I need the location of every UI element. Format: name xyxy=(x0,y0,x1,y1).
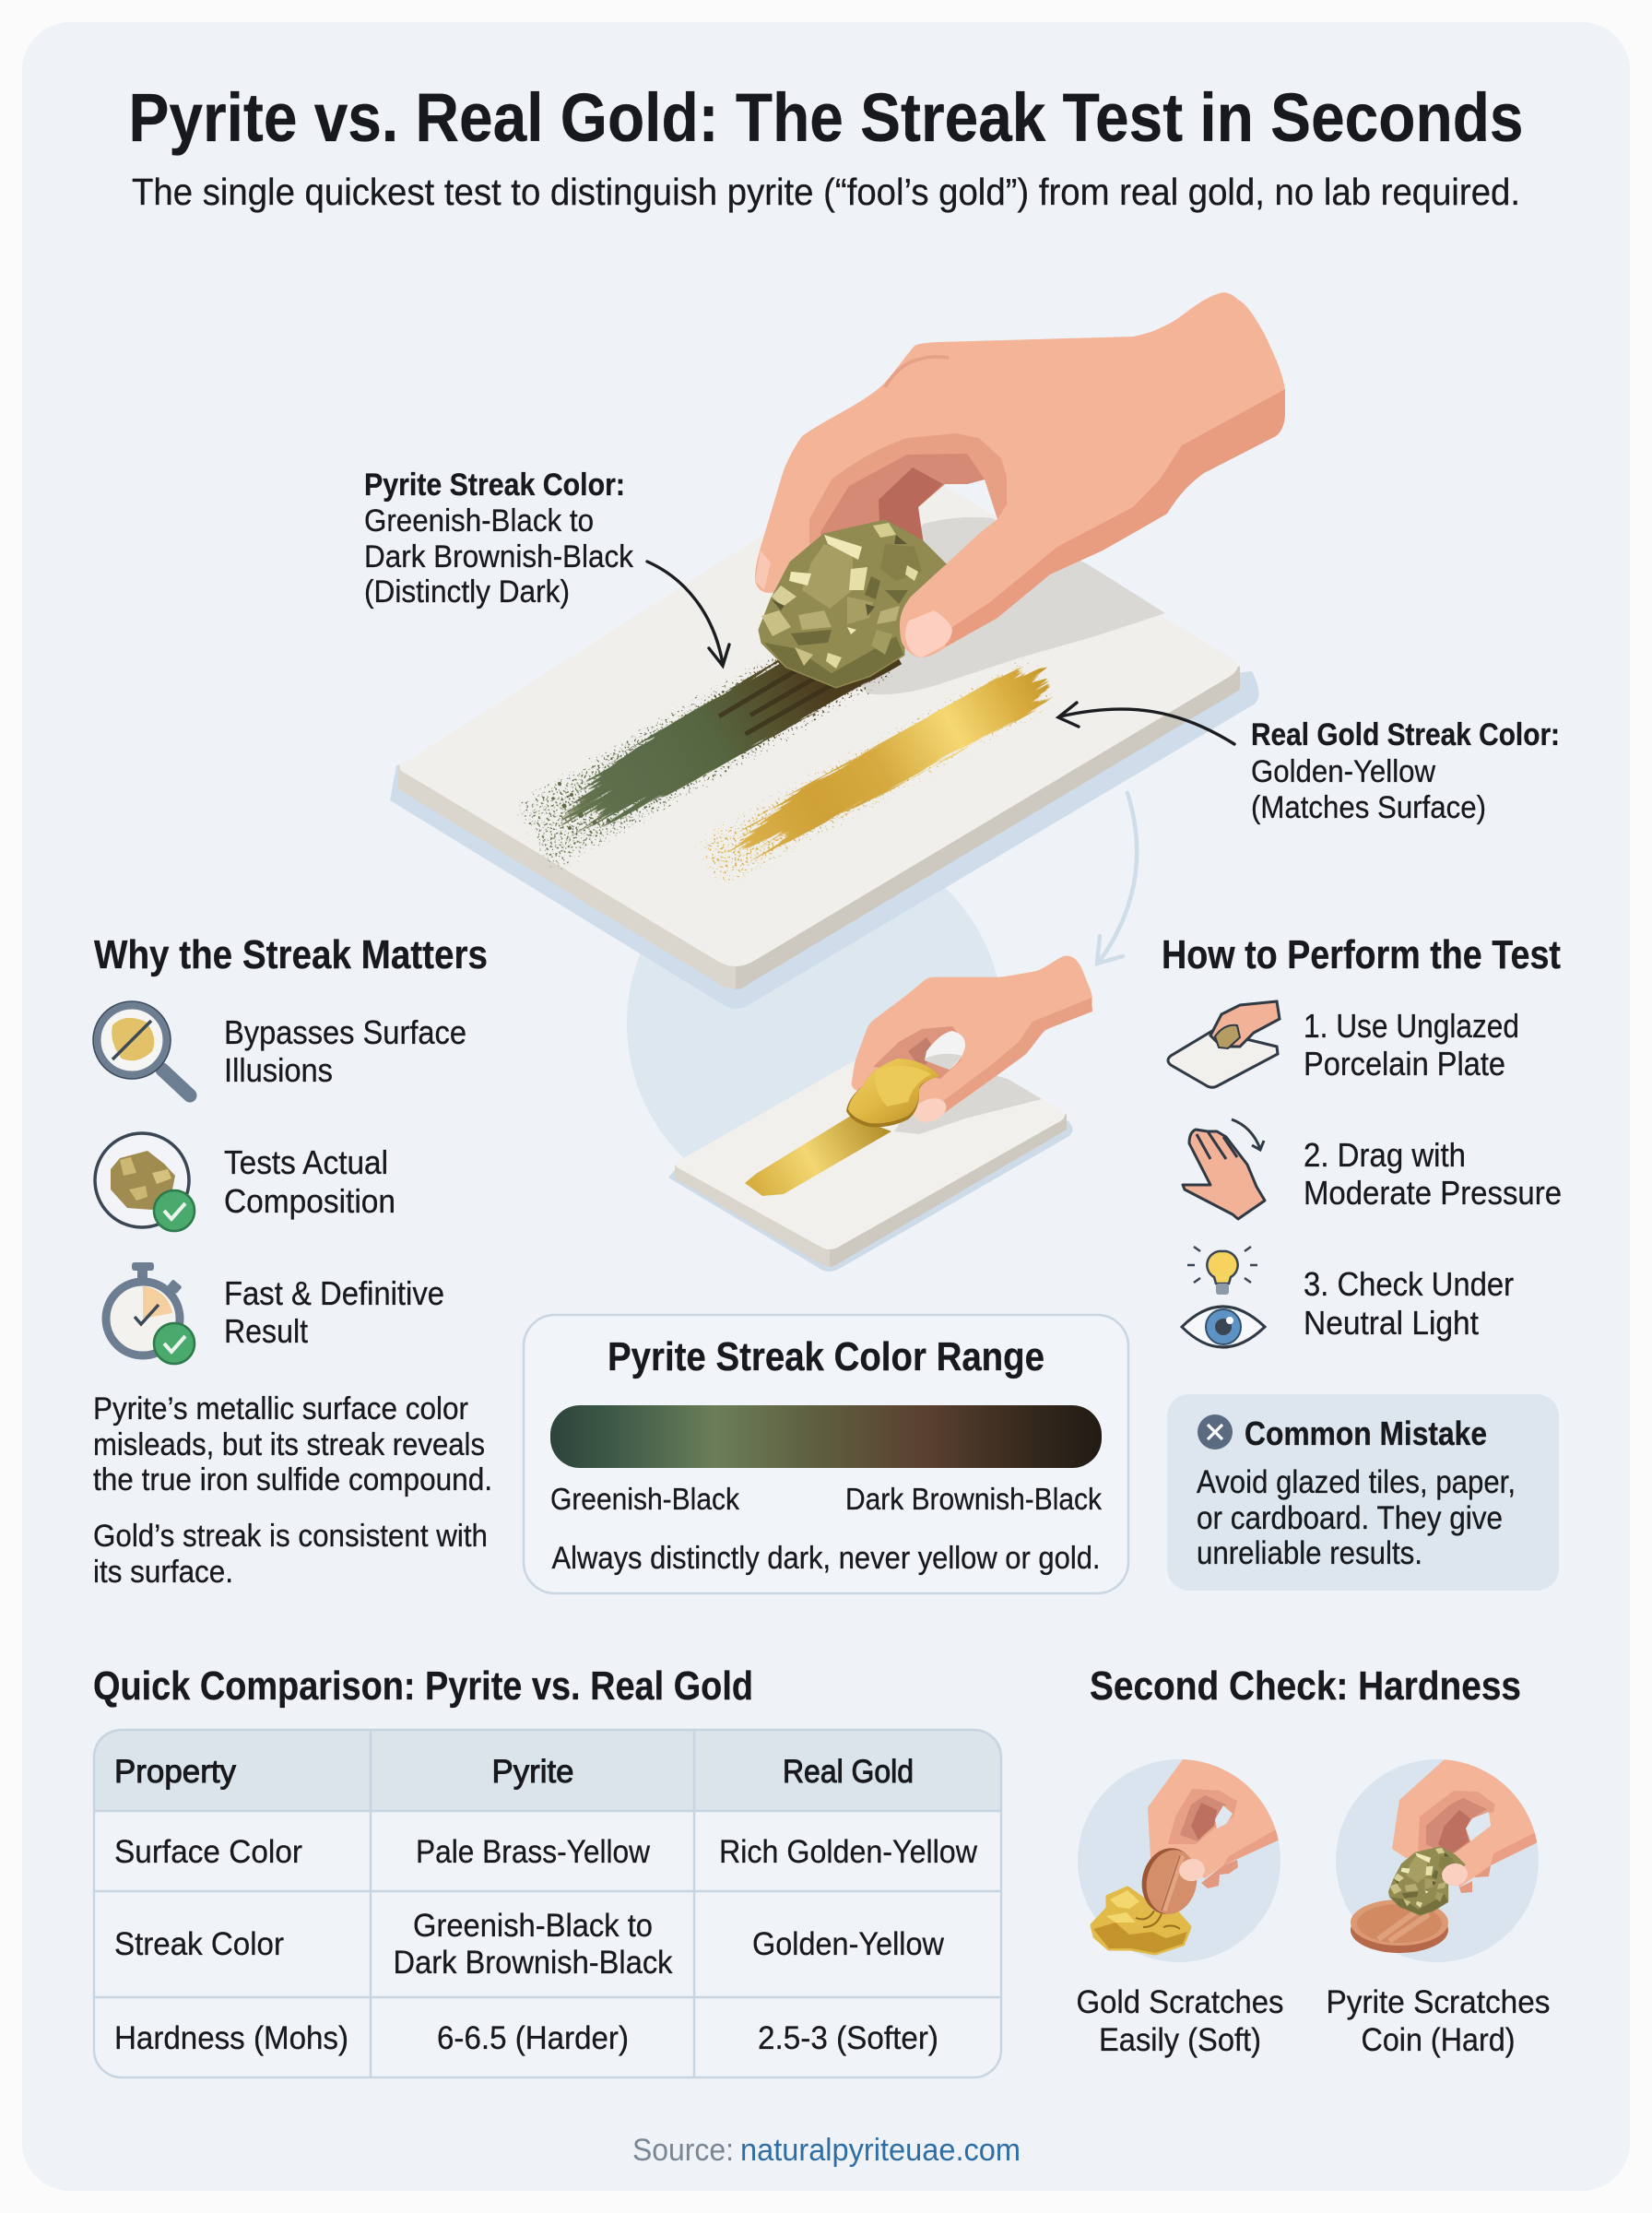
icon: bulb and eye xyxy=(1182,1247,1265,1347)
title: Pyrite vs. Real Gold: The Streak Test in Seconds xyxy=(129,79,1523,156)
table row: hardness xyxy=(114,2020,938,2056)
heading: Why the Streak Matters xyxy=(94,932,488,977)
gradient bar xyxy=(550,1405,1102,1468)
source line xyxy=(632,2133,1021,2168)
copper coin xyxy=(1351,1899,1448,1953)
text: explanation paragraph: Gold’s streak is consistent with xyxy=(93,1519,488,1554)
text: step 1: 1. Use Unglazed xyxy=(1304,1007,1519,1045)
illustration: small gold streak plate xyxy=(668,955,1092,1272)
pyrite rock xyxy=(1389,1847,1465,1915)
panel: pyrite streak color range xyxy=(524,1315,1128,1593)
callout: real gold streak color: Real Gold Streak Color: xyxy=(1251,717,1560,752)
table row: surface color: Pale Brass-Yellow xyxy=(416,1834,651,1870)
text: step 1 xyxy=(1304,1007,1519,1083)
small gold streak xyxy=(745,1116,891,1196)
text: step 3: 3. Check Under xyxy=(1304,1265,1514,1303)
hand xyxy=(1392,1759,1538,1893)
arrow: zoom to detail xyxy=(1097,793,1137,964)
arrow: pyrite callout xyxy=(647,562,729,666)
table row: surface color: Rich Golden-Yellow xyxy=(719,1834,978,1870)
text: explanation paragraph: the true iron sulfide compound. xyxy=(93,1462,492,1497)
plate shadow xyxy=(830,517,1165,694)
table header xyxy=(114,1754,914,1790)
body: or cardboard. They give xyxy=(1197,1500,1503,1536)
text: bypasses surface illusions xyxy=(224,1013,466,1089)
icon: magnifier xyxy=(93,1001,190,1095)
label: gold scratches easily xyxy=(1077,1984,1283,2058)
body: Avoid glazed tiles, paper, xyxy=(1197,1464,1516,1500)
icon: hand with arrow xyxy=(1183,1119,1265,1219)
text: step 1: Porcelain Plate xyxy=(1304,1045,1505,1083)
text: step 2: 2. Drag with xyxy=(1304,1136,1466,1174)
text: tests actual composition xyxy=(224,1143,395,1220)
arrow: gold callout xyxy=(1058,703,1234,744)
icon: x mark xyxy=(1198,1414,1233,1450)
callout: pyrite streak color xyxy=(364,467,634,609)
label: gold scratches easily: Gold Scratches xyxy=(1077,1984,1283,2020)
icon: stopwatch with check xyxy=(106,1262,195,1364)
body: unreliable results. xyxy=(1197,1535,1422,1571)
text: step 2 xyxy=(1304,1136,1562,1212)
illustration: gold scratches xyxy=(1078,1752,1291,1962)
table row: streak color: Streak Color xyxy=(114,1926,284,1962)
text: fast and definitive xyxy=(224,1274,444,1350)
table row: streak color xyxy=(114,1908,945,1981)
label: pyrite scratches coin: Pyrite Scratches xyxy=(1326,1984,1551,2020)
background circle behind small plate xyxy=(627,835,1003,1212)
table: comparison xyxy=(94,1730,1001,2077)
table header: Pyrite xyxy=(492,1754,573,1790)
gold nugget xyxy=(1092,1888,1189,1953)
heading: Pyrite Streak Color Range xyxy=(608,1334,1044,1379)
text: tests actual composition: Composition xyxy=(224,1182,395,1220)
panel: how to perform the test xyxy=(1162,932,1562,1591)
body xyxy=(1197,1464,1516,1571)
table row: streak color: Greenish-Black to xyxy=(413,1908,653,1944)
text: explanation paragraph: Pyrite’s metallic surface color xyxy=(93,1391,468,1426)
text: step 3: Neutral Light xyxy=(1304,1304,1479,1342)
table header: Property xyxy=(114,1754,236,1790)
text: explanation paragraph: its surface. xyxy=(93,1555,233,1590)
table row: hardness: 2.5-3 (Softer) xyxy=(758,2020,938,2056)
heading: quick comparison: Quick Comparison: Pyrite vs. Real Gold xyxy=(93,1663,753,1709)
callout: common mistake xyxy=(1167,1394,1559,1591)
text: bypasses surface illusions: Illusions xyxy=(224,1051,333,1089)
panel: why the streak matters xyxy=(93,932,492,1590)
callout: pyrite streak color: Greenish-Black to xyxy=(364,503,594,538)
text: step 2: Moderate Pressure xyxy=(1304,1174,1562,1212)
bar labels xyxy=(550,1482,1102,1516)
callout: real gold streak color xyxy=(1251,717,1560,825)
callout: real gold streak color: Golden-Yellow xyxy=(1251,754,1435,789)
text: bypasses surface illusions: Bypasses Surface xyxy=(224,1013,466,1051)
icon: rock with check xyxy=(95,1133,195,1231)
heading: second check hardness: Second Check: Hardness xyxy=(1090,1663,1521,1709)
callout: real gold streak color: (Matches Surface) xyxy=(1251,790,1486,825)
source line: Source: xyxy=(632,2133,734,2168)
text: fast and definitive: Fast & Definitive xyxy=(224,1274,444,1312)
plate shadow xyxy=(894,1058,1042,1134)
table row: surface color: Surface Color xyxy=(114,1834,302,1870)
label: pyrite scratches coin xyxy=(1326,1984,1551,2058)
text: tests actual composition: Tests Actual xyxy=(224,1143,388,1181)
text: fast and definitive: Result xyxy=(224,1312,308,1350)
heading: Common Mistake xyxy=(1245,1414,1487,1452)
small gold nugget xyxy=(846,1059,940,1127)
table row: hardness: 6-6.5 (Harder) xyxy=(437,2020,629,2056)
text: explanation paragraph: misleads, but its streak reveals xyxy=(93,1427,485,1462)
table row: hardness: Hardness (Mohs) xyxy=(114,2020,348,2056)
note: Always distinctly dark, never yellow or gold. xyxy=(551,1541,1101,1576)
bar labels: Dark Brownish-Black xyxy=(845,1482,1102,1516)
copper coin xyxy=(1136,1843,1203,1919)
text: step 3 xyxy=(1304,1265,1514,1342)
table header: Real Gold xyxy=(783,1754,914,1790)
illustration: pyrite scratches coin xyxy=(1336,1752,1549,1962)
table row: surface color xyxy=(114,1834,978,1870)
illustration: big plate with streaks xyxy=(390,292,1285,1009)
pyrite streak xyxy=(501,598,906,882)
callout: pyrite streak color: Dark Brownish-Black xyxy=(364,539,634,574)
table row: streak color: Golden-Yellow xyxy=(752,1926,945,1962)
callout: pyrite streak color: Pyrite Streak Color: xyxy=(364,467,625,503)
hand xyxy=(1148,1759,1279,1888)
subtitle: The single quickest test to distinguish pyrite (“fool’s gold”) from real gold, no lab required. xyxy=(132,171,1520,213)
source line: naturalpyriteuae.com xyxy=(740,2133,1021,2168)
pyrite rock xyxy=(760,521,945,687)
table row: streak color: Dark Brownish-Black xyxy=(393,1945,673,1981)
text: explanation paragraph xyxy=(93,1391,492,1590)
icon: plate and hand xyxy=(1168,1001,1280,1087)
small hand xyxy=(851,955,1092,1126)
hand holding pyrite xyxy=(755,292,1285,657)
heading: How to Perform the Test xyxy=(1162,932,1561,977)
label: pyrite scratches coin: Coin (Hard) xyxy=(1361,2022,1516,2058)
bar labels: Greenish-Black xyxy=(550,1482,739,1516)
label: gold scratches easily: Easily (Soft) xyxy=(1099,2022,1261,2058)
callout: pyrite streak color: (Distinctly Dark) xyxy=(364,574,570,609)
thumb over rock xyxy=(900,389,1285,657)
gold streak xyxy=(678,640,1080,901)
